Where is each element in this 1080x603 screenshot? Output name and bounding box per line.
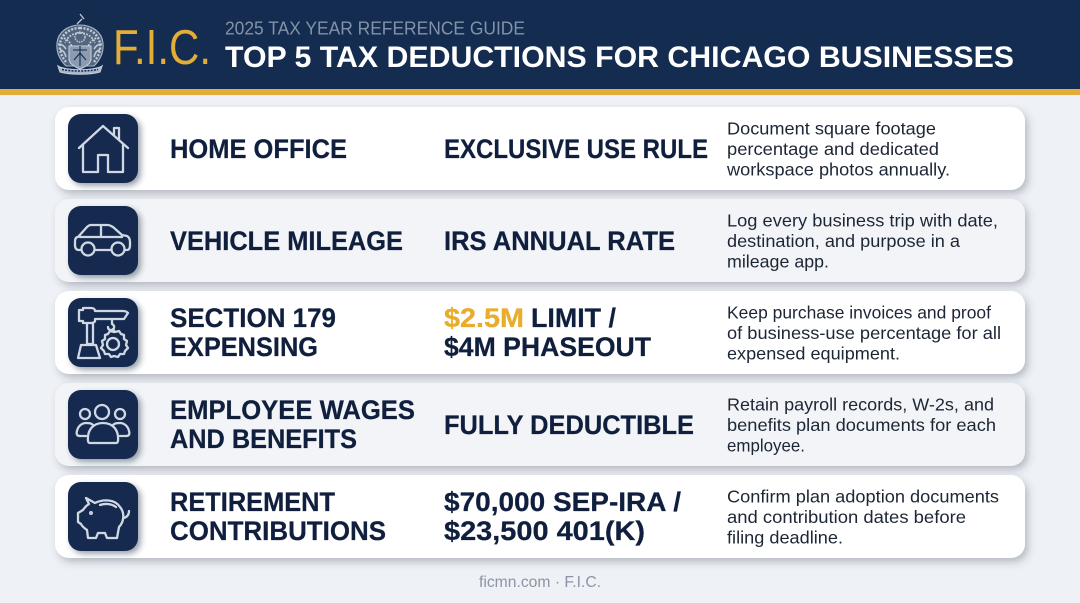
icon: people [68, 390, 138, 459]
tip: Document square footage [727, 118, 936, 138]
label: VEHICLE MILEAGE [170, 226, 403, 256]
label [170, 487, 386, 546]
row: retirement contributions [55, 475, 1025, 558]
value: $2.5M [444, 303, 524, 333]
tip: and contribution dates before [727, 507, 966, 527]
tip: expensed equipment. [727, 344, 900, 364]
tip [727, 210, 998, 272]
row: section 179 expensing [55, 291, 1025, 374]
label: SECTION 179 [170, 303, 336, 333]
label: EXPENSING [170, 332, 318, 362]
eyebrow: 2025 TAX YEAR REFERENCE GUIDE [225, 18, 525, 38]
tip: Retain payroll records, W-2s, and [727, 394, 994, 414]
tip: employee. [727, 436, 805, 456]
title: TOP 5 TAX DEDUCTIONS FOR CHICAGO BUSINESSES [225, 41, 1014, 74]
row: employee wages and benefits [55, 383, 1025, 466]
label: EMPLOYEE WAGES [170, 395, 415, 425]
label: HOME OFFICE [170, 134, 347, 164]
tip: mileage app. [727, 252, 829, 272]
tip [727, 394, 996, 456]
label: AND BENEFITS [170, 424, 357, 454]
icon: piggy bank [68, 482, 138, 551]
tip: filing deadline. [727, 528, 843, 548]
tip: of business-use percentage for all [727, 323, 1001, 343]
value: FULLY DEDUCTIBLE [444, 410, 694, 440]
row: home office [55, 107, 1025, 190]
tip: workspace photos annually. [726, 160, 950, 180]
value: $4M PHASEOUT [444, 332, 651, 362]
value: $70,000 SEP-IRA / [444, 487, 682, 517]
crest logo [57, 14, 103, 74]
tip: percentage and dedicated [727, 139, 939, 159]
value: IRS ANNUAL RATE [444, 226, 675, 256]
label [170, 303, 336, 362]
tip: Confirm plan adoption documents [727, 486, 999, 506]
tip [727, 302, 1001, 364]
value: EXCLUSIVE USE RULE [444, 134, 708, 164]
row: vehicle mileage [55, 199, 1025, 282]
tip [726, 118, 950, 180]
brand name: F.I.C. [113, 21, 211, 75]
tip: destination, and purpose in a [727, 231, 960, 251]
icon: car [68, 206, 138, 275]
header band [0, 0, 1080, 95]
icon: crane and gear [68, 298, 138, 367]
tip: benefits plan documents for each [727, 415, 996, 435]
footer: ficmn.com · F.I.C. [479, 574, 601, 591]
value: $23,500 401(K) [444, 516, 645, 546]
tip: Keep purchase invoices and proof [727, 302, 991, 322]
tip: Log every business trip with date, [727, 210, 998, 230]
value: LIMIT / [531, 303, 616, 333]
value [444, 487, 682, 546]
label: RETIREMENT [170, 487, 335, 517]
value [444, 303, 651, 362]
icon: house [68, 114, 138, 183]
label: CONTRIBUTIONS [170, 516, 386, 546]
label [170, 395, 415, 454]
tip [727, 486, 999, 548]
